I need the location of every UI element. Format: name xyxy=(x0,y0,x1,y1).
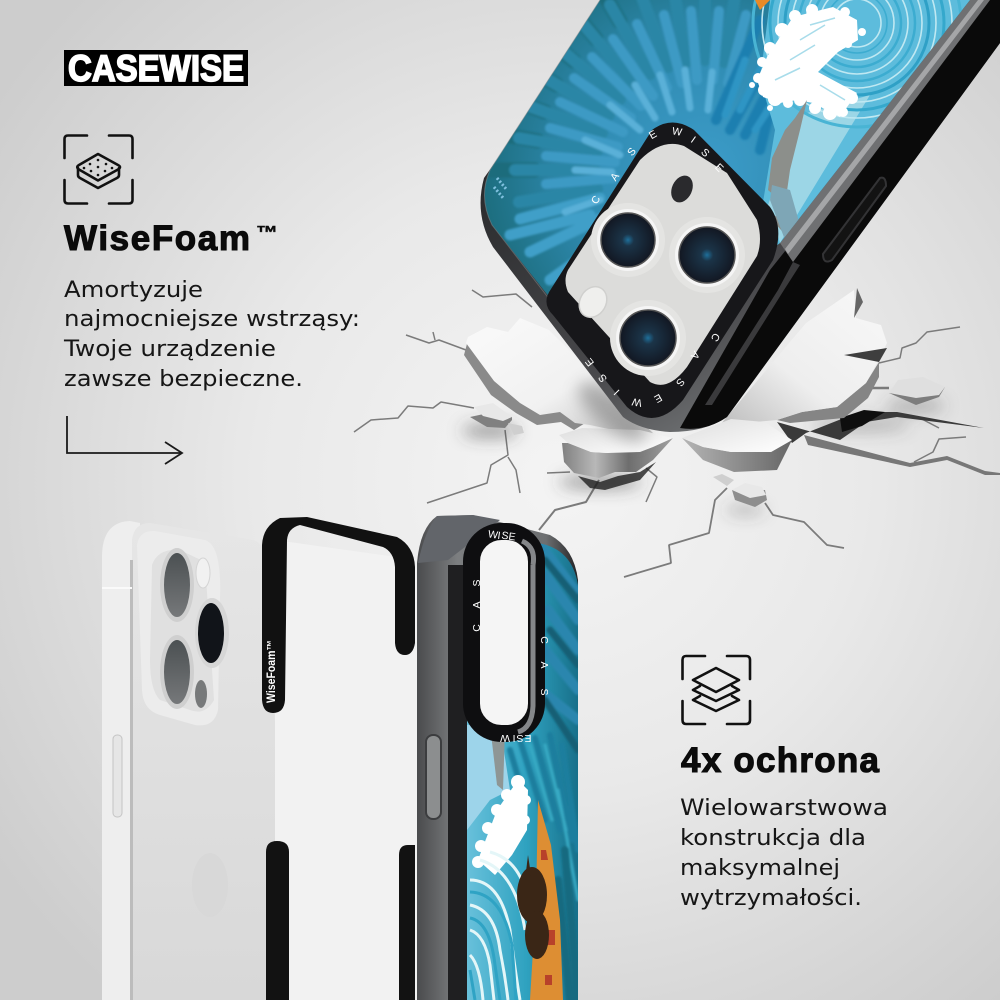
ring lettering: C xyxy=(471,624,483,632)
text block: 4x ochrona description: Wielowarstwowa xyxy=(680,795,888,821)
lens glass xyxy=(198,603,224,663)
ring lettering: E xyxy=(524,732,532,744)
case body xyxy=(481,0,1000,432)
lens xyxy=(160,548,194,622)
side band xyxy=(102,521,140,1000)
icon: stacked layers in focus brackets xyxy=(682,656,750,724)
cracked slab: center right xyxy=(682,419,792,472)
power button xyxy=(113,735,122,817)
camera island xyxy=(137,531,220,725)
foam xyxy=(472,775,531,875)
text block: WiseFoam description: Twoje urządzenie xyxy=(63,336,276,362)
sensor xyxy=(667,172,697,206)
ring lettering xyxy=(471,528,550,744)
soft shadows on the wall xyxy=(462,399,945,515)
text block: 4x ochrona description: konstrukcja dla xyxy=(680,825,866,851)
heading: 4x ochrona: 4x ochrona xyxy=(681,741,880,780)
camera ring lettering: E xyxy=(583,356,597,368)
ring lettering: E xyxy=(508,531,516,543)
rim highlight xyxy=(484,0,600,300)
logo: CASEWISE: CASEWISE xyxy=(68,48,244,89)
orange accent xyxy=(755,0,770,10)
text block: WiseFoam description: Amortyzuje xyxy=(64,277,203,303)
dog xyxy=(517,855,549,959)
clear backplate xyxy=(275,540,418,1000)
feathers xyxy=(488,0,773,286)
text block: WiseFoam description: najmocniejsze wstrząsy: xyxy=(64,306,360,332)
camera ring lettering: W xyxy=(671,125,683,139)
heading: WiseFoam: WiseFoam xyxy=(64,219,250,258)
WiseFoam black frame: lower right xyxy=(399,845,415,1000)
camera ring lettering: C xyxy=(589,193,603,206)
camera ring lettering: S xyxy=(698,146,712,160)
text block: WiseFoam description: zawsze bezpieczne. xyxy=(64,366,303,392)
back panel xyxy=(132,523,275,1000)
foam xyxy=(749,4,866,120)
ring lettering: S xyxy=(471,579,483,587)
ring lettering: S xyxy=(516,732,524,744)
text block: 4x ochrona description: wytrzymałości. xyxy=(680,885,862,911)
icon: foam pad in focus brackets xyxy=(64,136,132,204)
camera plateau xyxy=(566,144,760,385)
camera cutout ring xyxy=(472,532,536,734)
side button xyxy=(823,178,886,262)
camera ring lettering: I xyxy=(688,134,698,146)
lens glass xyxy=(164,640,190,704)
crevice under center slabs xyxy=(578,462,656,490)
lens xyxy=(195,598,229,668)
sea and sky xyxy=(761,0,970,245)
rocks: left xyxy=(470,403,524,435)
lens: bottom xyxy=(610,300,686,376)
swirl xyxy=(470,852,528,1000)
lens: left xyxy=(591,203,665,277)
camera ring lettering: E xyxy=(652,391,664,405)
text block: 4x ochrona description: maksymalnej xyxy=(680,855,840,881)
lens glass xyxy=(164,553,190,617)
wave artwork xyxy=(484,0,970,295)
ring lettering: I xyxy=(513,732,515,744)
back art xyxy=(467,544,578,1000)
cracks in the wall xyxy=(354,290,966,577)
side button xyxy=(426,735,441,819)
text block: WiseFoam description xyxy=(63,277,360,392)
ring lettering: S xyxy=(501,530,509,542)
ring lettering: I xyxy=(497,530,501,542)
lens xyxy=(160,635,194,709)
arrow xyxy=(67,416,182,464)
camera ring lettering: A xyxy=(608,171,622,183)
silver strip xyxy=(780,0,990,262)
WiseFoam black frame: upper xyxy=(262,517,415,713)
lens: right xyxy=(669,217,745,293)
camera ring lettering: S xyxy=(673,375,687,389)
phone: top case with wave art xyxy=(455,0,1000,432)
shadow beneath top phone xyxy=(570,373,654,451)
ring lettering: W xyxy=(500,732,510,744)
camera ring lettering: C xyxy=(708,331,722,344)
flash xyxy=(196,558,210,588)
camera ring lettering: S xyxy=(596,372,610,384)
ring lettering: A xyxy=(538,661,550,669)
cracked slab: left xyxy=(464,318,660,440)
ring lettering: C xyxy=(538,636,550,644)
camera ring lettering: E xyxy=(647,128,659,142)
cracked slab: right xyxy=(720,288,1000,475)
camera ring lettering: E xyxy=(712,161,726,175)
logo ghost xyxy=(192,853,228,917)
ring lettering: W xyxy=(487,528,499,542)
camera ring xyxy=(546,122,778,418)
camera ring lettering xyxy=(583,125,726,409)
camera ring lettering: I xyxy=(612,387,622,397)
black side xyxy=(680,0,1000,429)
pizza slice xyxy=(530,800,563,1000)
side wall xyxy=(417,515,578,1000)
wave spiral xyxy=(753,0,961,127)
phone: white iPhone back xyxy=(102,521,275,1000)
rocks: center xyxy=(713,474,767,507)
foam ripples xyxy=(775,18,845,100)
camera ring lettering: A xyxy=(688,349,702,361)
cracked slab: center left xyxy=(559,428,673,478)
camera ring lettering: S xyxy=(625,145,639,159)
sensor xyxy=(195,680,207,708)
text block: 4x ochrona description xyxy=(680,795,888,911)
WiseFoam black frame: lower left xyxy=(266,841,289,1000)
heading: WiseFoam: ™ xyxy=(256,223,278,244)
rock xyxy=(768,100,807,240)
artwork mark xyxy=(494,178,507,199)
WiseFoam label: WiseFoam™ xyxy=(266,640,278,703)
rock: right xyxy=(889,377,945,405)
flash xyxy=(574,282,612,322)
ring lettering: S xyxy=(538,688,550,696)
feathers xyxy=(510,545,578,1000)
camera ring lettering: W xyxy=(631,395,643,409)
phone: exploded black case xyxy=(417,515,580,1000)
ring lettering: A xyxy=(471,601,483,609)
